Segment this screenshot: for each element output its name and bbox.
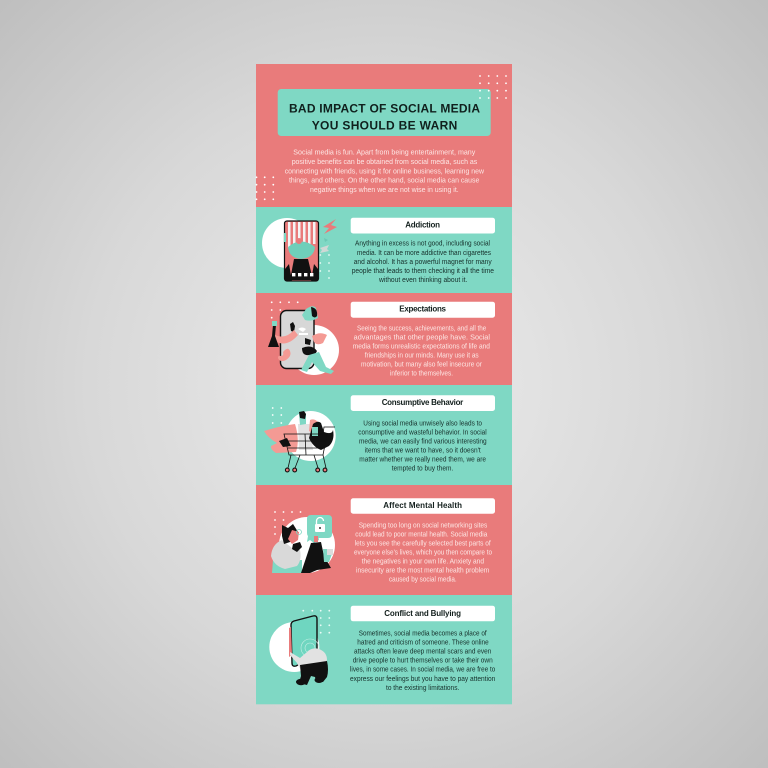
text: conflict and bullying: to the existing limitations.: [386, 685, 459, 692]
panel: addiction: [256, 207, 512, 293]
text: expectations: motivation, but many also feel insecure or: [361, 362, 483, 369]
text: addiction: media. It can be more addictive than cigarettes: [357, 250, 491, 257]
text: expectations: Seeing the success, achievements, and all the: [357, 325, 486, 332]
heading pill: consumptive behavior: Consumptive Behavior: [382, 398, 463, 407]
heading pill: addiction: [351, 218, 495, 234]
heading pill: affect mental health: [351, 498, 495, 514]
panel: header: [256, 64, 512, 208]
text: conflict and bullying: attacks often leave deep mental scars and even: [354, 649, 491, 656]
heading pill: conflict and bullying: [351, 606, 495, 621]
text: consumptive behavior: items that we want to have, so it doesn't: [365, 448, 481, 455]
intro text: things, and others. On the other hand, social media can cause: [289, 178, 479, 185]
text: conflict and bullying: [350, 630, 495, 692]
text: conflict and bullying: Sometimes, social media becomes a place of: [359, 630, 487, 637]
text: affect mental health: lets you see the carefully selected best parts of: [355, 540, 491, 547]
panel: consumptive behavior: [256, 385, 512, 485]
text: affect mental health: everyone else's lives, which you then compare to: [354, 549, 492, 556]
text: expectations: inferior to themselves.: [390, 371, 453, 378]
dots: top right: [479, 75, 507, 99]
text: addiction: [352, 241, 494, 284]
heading pill: consumptive behavior: [351, 395, 495, 411]
text: expectations: media forms unrealistic expectations of life and: [353, 343, 490, 350]
icon: phone and person: [269, 610, 330, 685]
text: affect mental health: could lead to poor mental health. Social media: [355, 531, 487, 538]
text: consumptive behavior: consumptive and wasteful behavior. In social: [358, 430, 487, 437]
text: consumptive behavior: [358, 421, 487, 473]
heading pill: conflict and bullying: Conflict and Bullying: [384, 609, 461, 618]
text: expectations: [353, 325, 490, 378]
panel: conflict and bullying: [256, 595, 512, 704]
text: consumptive behavior: Using social media unwisely also leads to: [363, 421, 482, 428]
heading pill: affect mental health: Affect Mental Health: [383, 501, 462, 510]
text: affect mental health: [354, 522, 492, 583]
icon: expectations: [268, 301, 339, 375]
text: conflict and bullying: drive people to hurt themselves or take their own: [353, 658, 493, 665]
text: consumptive behavior: media, we can easily find various interesting: [359, 439, 487, 446]
heading pill: expectations: [351, 302, 495, 318]
text: conflict and bullying: hatred and criticism of someone. These online: [357, 640, 489, 647]
intro text: connecting with friends, using it for online business, learning new: [285, 168, 485, 175]
text: affect mental health: insecurity are the most mental health problem: [356, 567, 489, 574]
icon: shopping cart: [264, 407, 336, 472]
text: consumptive behavior: tempted to buy them.: [392, 466, 453, 473]
text: expectations: friendships in our minds. Many use it as: [365, 352, 479, 359]
text: affect mental health: caused by social media.: [389, 576, 457, 583]
title box: YOU SHOULD BE WARN: [312, 118, 457, 132]
icon: phone addiction: [262, 218, 337, 281]
title box: [278, 89, 491, 136]
text: addiction: without even thinking about it.: [378, 277, 467, 284]
text: conflict and bullying: express our feelings but you have to pay attention: [350, 676, 495, 683]
text: expectations: advantages that other people have. Social: [354, 334, 490, 341]
intro text: Social media is fun. Apart from being entertainment, many: [293, 150, 476, 157]
intro text: negative things when we are not wise in using it.: [310, 187, 459, 194]
panel: affect mental health: [256, 485, 512, 595]
heading pill: expectations: Expectations: [399, 305, 447, 314]
panel: expectations: [256, 293, 512, 385]
text: addiction: people that leads to them checking it all the time: [352, 268, 494, 275]
heading pill: addiction: Addiction: [405, 221, 440, 230]
icon: speech bubble with lock: [307, 515, 332, 542]
title box: BAD IMPACT OF SOCIAL MEDIA: [289, 101, 480, 115]
intro text: positive benefits can be obtained from social media, such as: [292, 159, 478, 166]
intro text: [285, 150, 485, 194]
text: consumptive behavior: matter whether we really need them, we are: [359, 457, 486, 464]
dots: bottom left: [256, 176, 274, 200]
text: affect mental health: Spending too long on social networking sites: [359, 522, 488, 529]
icon: mental health: [271, 511, 335, 573]
text: addiction: Anything in excess is not good, including social: [355, 241, 490, 248]
text: addiction: and alcohol. It has a powerful magnet for many: [354, 259, 492, 266]
text: affect mental health: the negatives in your own life. Anxiety and: [362, 558, 484, 565]
text: conflict and bullying: lives, in some cases. In social media, we are free to: [350, 667, 495, 674]
